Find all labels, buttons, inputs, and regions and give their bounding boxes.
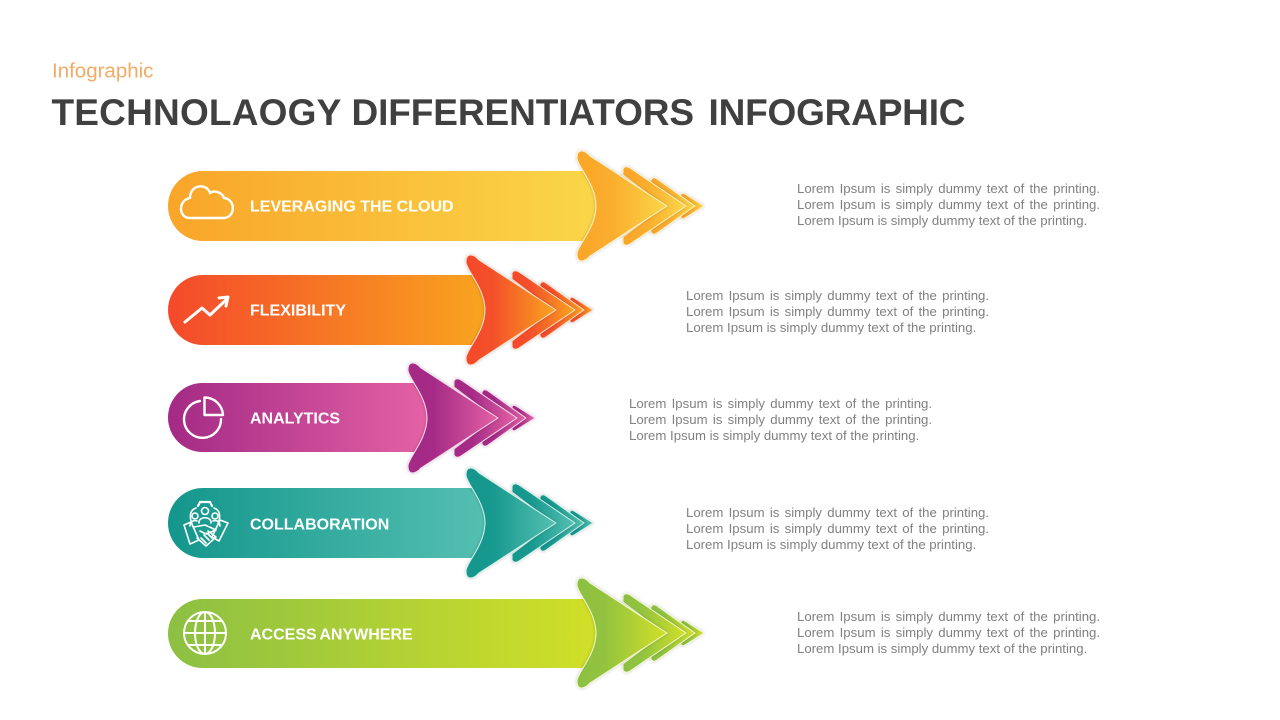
arrow 5	[577, 578, 704, 688]
description 3: Lorem Ipsum is simply dummy text of the printing.	[629, 412, 932, 427]
row 2: flexibility	[168, 255, 989, 365]
subtitle: Infographic	[52, 60, 153, 82]
label 2: FLEXIBILITY	[250, 302, 346, 320]
icon: growth arrow	[185, 297, 228, 322]
arrow 4	[466, 468, 593, 578]
pill bar 3	[168, 383, 431, 452]
description 2: Lorem Ipsum is simply dummy text of the printing.	[686, 304, 989, 319]
label 5: ACCESS ANYWHERE	[250, 626, 413, 644]
description 3: Lorem Ipsum is simply dummy text of the printing.	[629, 396, 932, 411]
label 3: ANALYTICS	[250, 410, 340, 428]
pill bar 5	[168, 599, 600, 668]
description 2: Lorem Ipsum is simply dummy text of the printing.	[686, 288, 989, 303]
description 5: Lorem Ipsum is simply dummy text of the printing.	[797, 609, 1100, 624]
description 5: Lorem Ipsum is simply dummy text of the printing.	[797, 625, 1100, 640]
description 4: Lorem Ipsum is simply dummy text of the printing.	[686, 537, 976, 552]
arrow 3	[408, 363, 535, 473]
description 5: Lorem Ipsum is simply dummy text of the printing.	[797, 641, 1087, 656]
arrow 2	[466, 255, 593, 365]
description 1: Lorem Ipsum is simply dummy text of the printing.	[797, 213, 1087, 228]
description 4: Lorem Ipsum is simply dummy text of the printing.	[686, 505, 989, 520]
row 5: access anywhere	[168, 578, 1100, 688]
row 3: analytics	[168, 363, 932, 473]
arrow 1	[577, 151, 704, 261]
icon: pie chart	[184, 397, 223, 438]
label 4: COLLABORATION	[250, 516, 389, 534]
title: TECHNOLAOGY	[52, 92, 342, 133]
description 4: Lorem Ipsum is simply dummy text of the printing.	[686, 521, 989, 536]
label 1: LEVERAGING THE CLOUD	[250, 198, 454, 216]
row 4: collaboration	[168, 468, 989, 578]
pill bar 4	[168, 488, 489, 558]
description 1: Lorem Ipsum is simply dummy text of the printing.	[797, 197, 1100, 212]
description 1: Lorem Ipsum is simply dummy text of the printing.	[797, 181, 1100, 196]
pill bar 2	[168, 275, 489, 345]
icon: cloud	[181, 186, 233, 218]
pill bar 1	[168, 171, 600, 241]
icon: handshake with gear and people	[184, 502, 228, 546]
icon: globe	[184, 612, 226, 654]
description 3: Lorem Ipsum is simply dummy text of the printing.	[629, 428, 919, 443]
description 2: Lorem Ipsum is simply dummy text of the printing.	[686, 320, 976, 335]
title: DIFFERENTIATORS	[352, 92, 694, 133]
row 1: leveraging the cloud	[168, 151, 1100, 261]
title: INFOGRAPHIC	[708, 92, 965, 133]
